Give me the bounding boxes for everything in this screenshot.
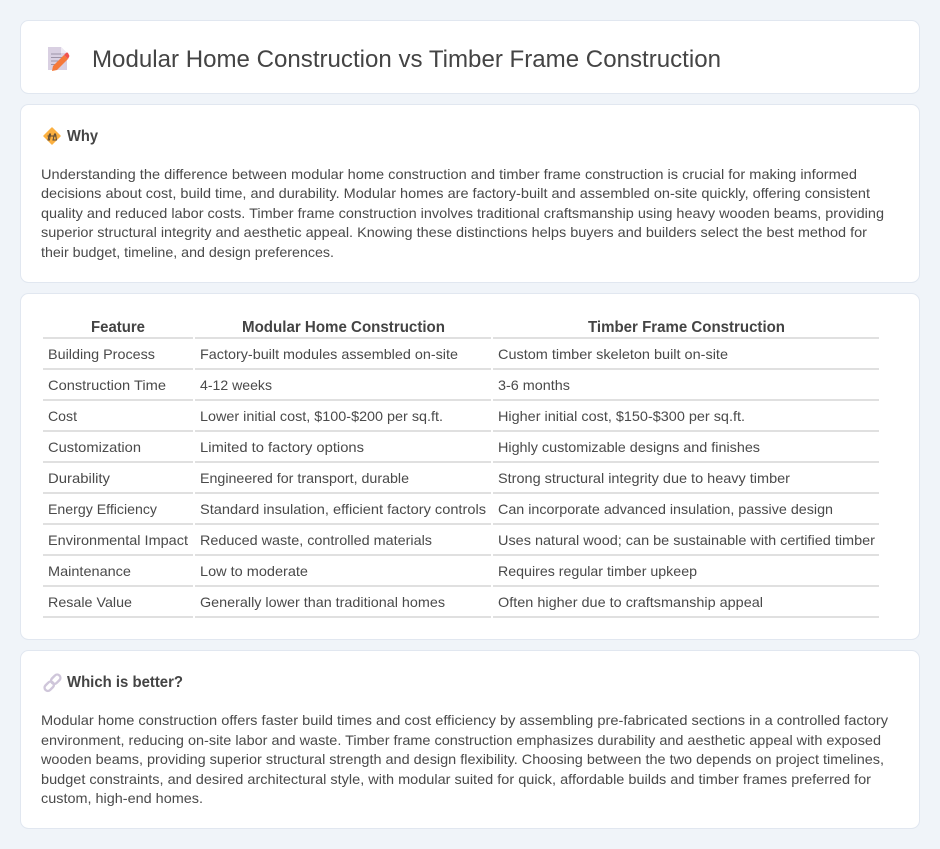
row: cost: Higher initial cost, $150-$300 per sq.ft. xyxy=(498,408,745,424)
row: energy efficiency xyxy=(48,501,833,517)
row: construction time: 3-6 months xyxy=(498,377,570,393)
text block: why paragraph: Understanding the difference between modular home construction and timber frame construction is crucial for making informed xyxy=(41,166,857,182)
table header row xyxy=(91,319,785,336)
row: cost: Cost xyxy=(48,408,77,424)
text block: why paragraph: superior structural integrity and aesthetic appeal. Knowing these distinctions helps buyers and builders select the best method for xyxy=(41,224,867,240)
row: energy efficiency: Can incorporate advanced insulation, passive design xyxy=(498,501,833,517)
panel: header xyxy=(20,20,920,94)
text block: which paragraph: environment, reducing on-site labor and waste. Timber frame construction emphasizes durability and aesthetic appeal with exposed xyxy=(41,732,881,748)
row: construction time xyxy=(48,377,570,393)
row: building process: Building Process xyxy=(48,346,155,362)
text block: which paragraph xyxy=(40,712,888,806)
row: customization: Customization xyxy=(48,439,141,455)
row: cost xyxy=(48,408,745,424)
row: building process: Factory-built modules assembled on-site xyxy=(200,346,458,362)
row: durability: Engineered for transport, durable xyxy=(200,470,409,486)
heading: which is better: Which is better? xyxy=(67,674,183,691)
row: resale value: Generally lower than traditional homes xyxy=(200,594,445,610)
row: construction time: 4-12 weeks xyxy=(200,377,272,393)
row: durability: Strong structural integrity due to heavy timber xyxy=(498,470,790,486)
row: customization: Limited to factory options xyxy=(200,439,364,455)
text block: why paragraph: quality and reduced labor costs. Timber frame construction involves traditional craftsmanship using heavy wooden beams, providing xyxy=(41,205,884,221)
row: maintenance xyxy=(48,563,697,579)
row: environmental impact: Reduced waste, controlled materials xyxy=(200,532,432,548)
row: resale value: Often higher due to craftsmanship appeal xyxy=(498,594,763,610)
row: energy efficiency: Energy Efficiency xyxy=(48,501,157,517)
panel: which is better xyxy=(20,650,920,828)
text block: why paragraph: their budget, timeline, and design preferences. xyxy=(41,244,334,260)
panel: comparison table xyxy=(20,294,920,640)
icon: memo with pencil xyxy=(48,47,69,71)
row: environmental impact: Environmental Impact xyxy=(48,532,188,548)
row: customization: Highly customizable designs and finishes xyxy=(498,439,760,455)
row: construction time: Construction Time xyxy=(48,377,166,393)
icon: link xyxy=(43,673,62,692)
row: cost: Lower initial cost, $100-$200 per sq.ft. xyxy=(200,408,443,424)
row: resale value: Resale Value xyxy=(48,594,132,610)
row: building process xyxy=(48,346,728,362)
row: resale value xyxy=(48,594,763,610)
row: durability xyxy=(48,470,790,486)
table header row: Feature xyxy=(91,319,145,336)
row: maintenance: Maintenance xyxy=(48,563,131,579)
row: durability: Durability xyxy=(48,470,110,486)
row: maintenance: Requires regular timber upkeep xyxy=(498,563,697,579)
row: building process: Custom timber skeleton built on-site xyxy=(498,346,728,362)
text block: why paragraph xyxy=(41,166,884,260)
row: energy efficiency: Standard insulation, efficient factory controls xyxy=(200,501,486,517)
panel: why xyxy=(20,104,920,282)
table header row: Modular Home Construction xyxy=(242,319,445,336)
row: environmental impact xyxy=(48,532,875,548)
row: maintenance: Low to moderate xyxy=(200,563,308,579)
table header row: Timber Frame Construction xyxy=(588,319,785,336)
icon: construction diamond xyxy=(44,128,60,144)
text block: which paragraph: Modular home construction offers faster build times and cost efficiency by assembling pre-fabricated sections in a controlled factory xyxy=(41,712,888,728)
title: Modular Home Construction vs Timber Frame Construction xyxy=(92,46,721,73)
row: environmental impact: Uses natural wood; can be sustainable with certified timber xyxy=(498,532,875,548)
text block: which paragraph: wooden beams, providing superior structural strength and design flexibility. Choosing between the two depends on project timelines, xyxy=(40,751,884,767)
heading: why: Why xyxy=(67,128,98,145)
text block: why paragraph: decisions about cost, build time, and durability. Modular homes are factory-built and assembled on-site quickly, offering consistent xyxy=(41,185,870,201)
text block: which paragraph: custom, high-end homes. xyxy=(41,790,203,806)
row: customization xyxy=(48,439,760,455)
text block: which paragraph: budget constraints, and desired architectural style, with modular suited for quick, affordable builds and timber frames preferred for xyxy=(41,771,871,787)
